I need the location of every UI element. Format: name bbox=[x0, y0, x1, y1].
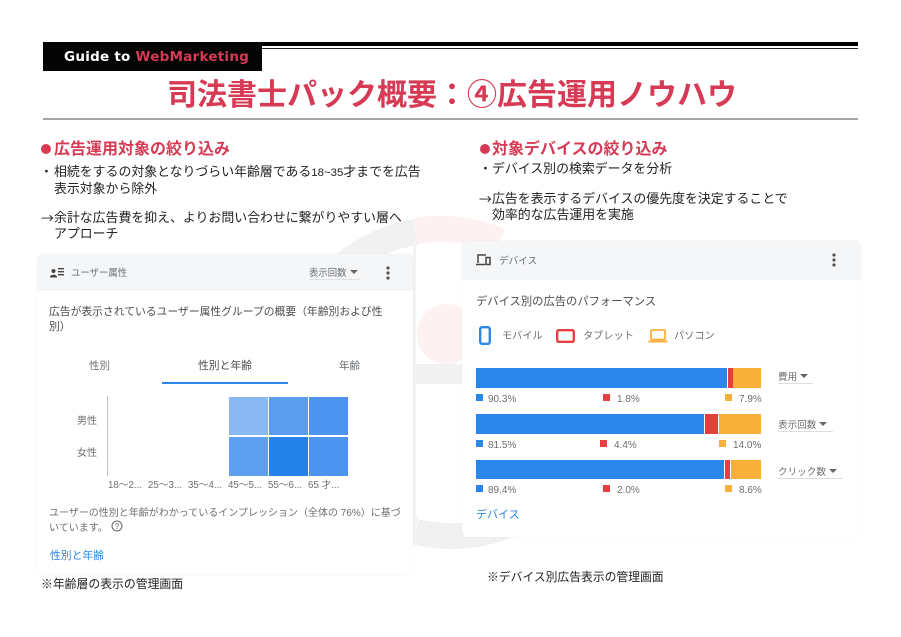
section heading: 広告運用対象の絞り込み bbox=[54, 141, 230, 158]
bar: impressions: 81.5% bbox=[488, 440, 516, 451]
bar: cost: 費用 bbox=[778, 372, 797, 383]
bar: cost bbox=[476, 368, 813, 405]
section: device targeting: デバイス別の検索データを分析 bbox=[492, 161, 672, 176]
section: audience targeting: 余計な広告費を抑え、よりお問い合わせに繋がりやすい層へ bbox=[54, 210, 402, 225]
arrow text: → bbox=[41, 208, 54, 227]
footnote: いています。 bbox=[49, 523, 108, 534]
icon: devices bbox=[476, 254, 491, 266]
heatmap bbox=[77, 396, 348, 491]
panel header bbox=[462, 241, 861, 280]
panel header bbox=[37, 254, 413, 291]
axis bbox=[107, 396, 108, 476]
metric selector bbox=[309, 265, 361, 280]
header tag: Guide to WebMarketing bbox=[43, 42, 262, 71]
heatmap: 35～4... bbox=[188, 480, 222, 491]
legend: モバイル bbox=[502, 331, 543, 342]
section: audience targeting: 表示対象から除外 bbox=[54, 181, 157, 196]
bar: clicks: 2.0% bbox=[617, 485, 640, 496]
bar: cost: 1.8% bbox=[617, 394, 640, 405]
bar: impressions: 表示回数 bbox=[778, 420, 816, 431]
section bullet bbox=[41, 144, 51, 154]
card heading bbox=[49, 306, 383, 333]
header tag: Guide to WebMarketing: Guide to WebMarketing bbox=[64, 49, 249, 65]
bar: cost: 90.3% bbox=[488, 394, 516, 405]
tab: gender and age: 性別と年齢 bbox=[198, 360, 252, 372]
bar: clicks: クリック数 bbox=[778, 467, 826, 478]
panel: user attributes bbox=[37, 254, 413, 575]
link: 性別と年齢 bbox=[50, 550, 104, 562]
section bullet bbox=[480, 144, 490, 154]
menu dots bbox=[386, 266, 390, 280]
section: audience targeting bbox=[40, 140, 421, 241]
header label: ユーザー属性 bbox=[71, 267, 127, 278]
x labels: 18～2... bbox=[108, 480, 142, 491]
legend bbox=[479, 326, 715, 345]
legend: タブレット bbox=[583, 331, 634, 342]
link: デバイス bbox=[476, 509, 520, 521]
menu dots bbox=[832, 253, 836, 267]
legend: mobile bbox=[479, 326, 491, 345]
section: device targeting bbox=[479, 140, 788, 222]
tab: gender: 性別 bbox=[89, 360, 110, 372]
section: audience targeting: 相続をするの対象となりづらい年齢層である18~35才までを広告 bbox=[54, 164, 421, 179]
row labels: 男性 bbox=[77, 416, 97, 427]
legend: パソコン bbox=[674, 331, 715, 342]
footnote: ユーザーの性別と年齢がわかっているインプレッション（全体の 76%）に基づ bbox=[49, 508, 401, 519]
card heading: 広告が表示されているユーザー属性グループの概要（年齢別および性 bbox=[49, 306, 383, 318]
section heading: 対象デバイスの絞り込み bbox=[492, 141, 668, 158]
header label: デバイス bbox=[499, 256, 537, 267]
tabs bbox=[89, 360, 360, 384]
heatmap: 55～6... bbox=[268, 480, 302, 491]
heatmap: 25～3... bbox=[148, 480, 182, 491]
card heading: 別） bbox=[49, 321, 71, 333]
bar: clicks: 89.4% bbox=[488, 485, 516, 496]
heatmap: 65 才... bbox=[308, 480, 339, 491]
section: audience targeting: アプローチ bbox=[54, 226, 118, 241]
heatmap: 45～5... bbox=[228, 480, 262, 491]
metric selector: 表示回数 bbox=[309, 267, 347, 278]
title underline bbox=[43, 118, 858, 120]
section: device targeting: 広告を表示するデバイスの優先度を決定することで bbox=[492, 191, 788, 206]
icon: user list bbox=[50, 268, 64, 278]
heatmap: 女性 bbox=[77, 448, 97, 459]
card heading: デバイス別の広告のパフォーマンス bbox=[476, 296, 656, 308]
panel: devices bbox=[462, 241, 861, 537]
legend: desktop bbox=[648, 329, 668, 342]
header rule bbox=[262, 42, 858, 49]
caption: age: ※年齢層の表示の管理画面 bbox=[41, 577, 183, 591]
bar: clicks: 8.6% bbox=[739, 485, 762, 496]
footnote bbox=[49, 507, 401, 534]
title: 司法書士パック概要：④広告運用ノウハウ bbox=[167, 79, 737, 112]
arrow text: → bbox=[479, 189, 492, 208]
caption: devices: ※デバイス別広告表示の管理画面 bbox=[487, 570, 664, 584]
legend: tablet bbox=[556, 329, 575, 343]
cells bbox=[229, 397, 268, 435]
bar: clicks bbox=[476, 460, 843, 496]
tab underline bbox=[162, 382, 288, 384]
bar: impressions: 4.4% bbox=[614, 440, 637, 451]
section: device targeting: 効率的な広告運用を実施 bbox=[492, 207, 634, 222]
bar: cost: 7.9% bbox=[739, 394, 762, 405]
bar: impressions: 14.0% bbox=[733, 440, 761, 451]
tab: age: 年齢 bbox=[339, 360, 360, 372]
bullet text: ・ bbox=[479, 161, 492, 176]
icon: help: ? bbox=[115, 522, 120, 531]
bar: impressions bbox=[476, 414, 833, 451]
icon: help bbox=[112, 520, 122, 532]
bullet text: ・ bbox=[40, 164, 53, 179]
